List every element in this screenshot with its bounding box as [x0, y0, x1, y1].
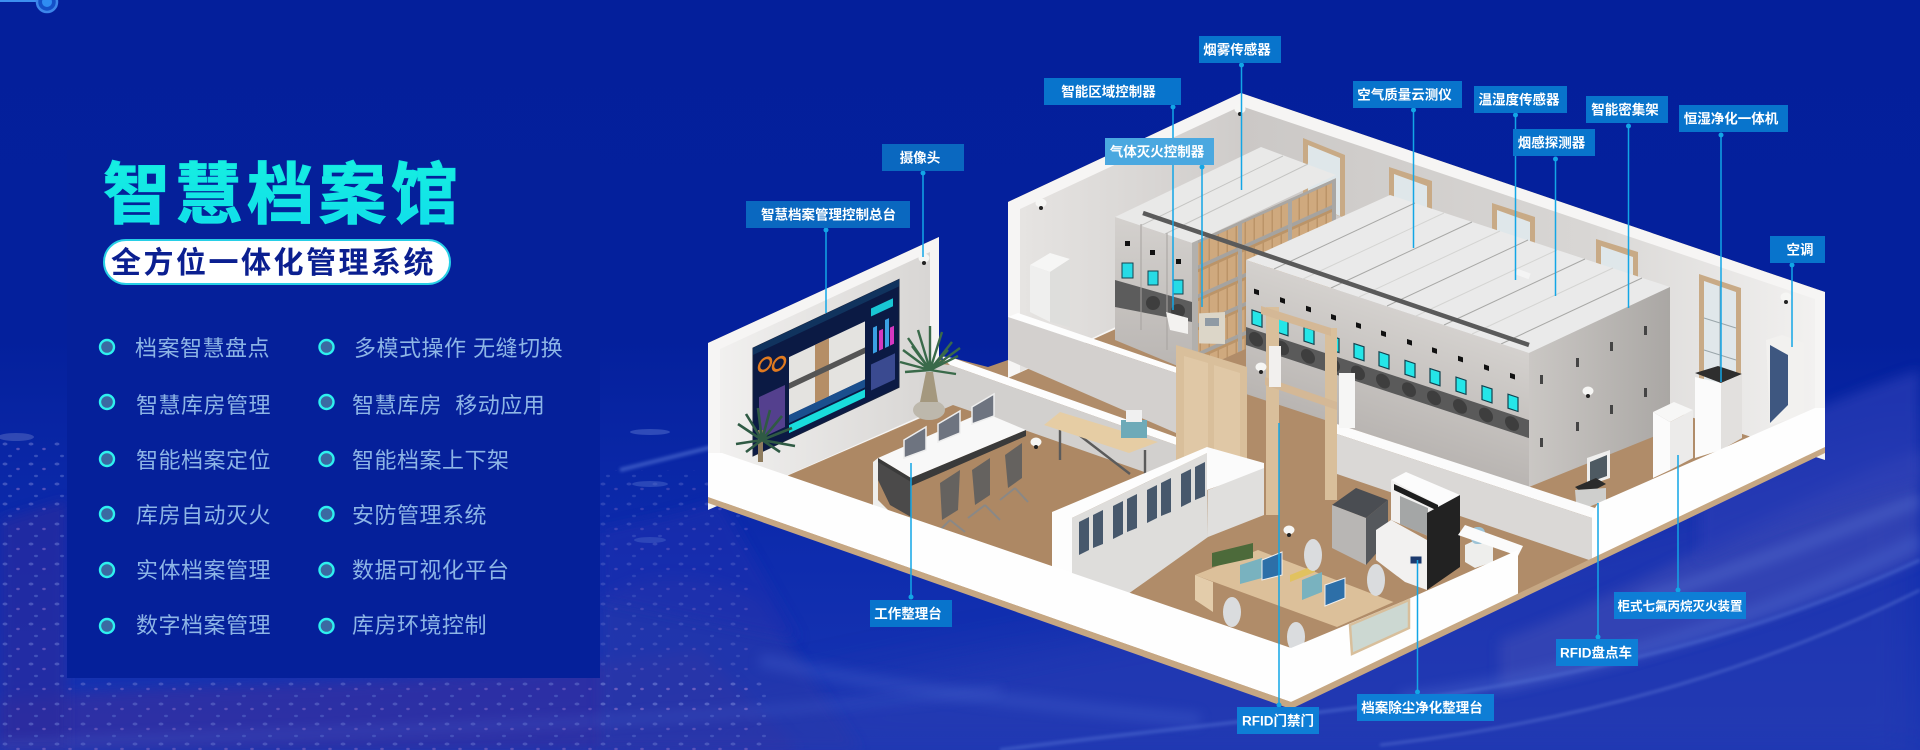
dome cameras — [918, 104, 1792, 537]
water dispenser — [1465, 527, 1493, 568]
label: 摄像头 — [882, 144, 964, 257]
item: 智慧库房管理: 智慧库房管理 — [136, 393, 271, 418]
item: 库房环境控制: 库房环境控制 — [352, 613, 487, 638]
label: 摄像头: 摄像头 — [900, 150, 940, 166]
windows on back wall — [1303, 138, 1741, 385]
item: 智能档案定位: 智能档案定位 — [136, 448, 271, 473]
white cabinet in back room — [1030, 253, 1070, 327]
label: 智慧档案管理控制总台: 智慧档案管理控制总台 — [761, 206, 896, 222]
item: 智能档案上下架: 智能档案上下架 — [352, 448, 510, 473]
label: 空气质量云测仪: 空气质量云测仪 — [1357, 86, 1452, 102]
gas fire controller — [1199, 307, 1225, 348]
label: 气体灭火控制器 — [1105, 138, 1214, 307]
copier — [1332, 488, 1388, 565]
floor base — [708, 93, 1825, 706]
dust purifier bench — [1376, 472, 1460, 590]
item: 数据可视化平台: 数据可视化平台 — [352, 558, 510, 583]
label: 智慧档案管理控制总台 — [746, 201, 910, 313]
item: 数字档案管理: 数字档案管理 — [136, 613, 271, 638]
ornament: top-left node — [0, 0, 57, 12]
back room front wall — [1008, 313, 1176, 433]
item: 智慧库房 移动应用: 智慧库房 移动应用 — [352, 393, 545, 418]
label: 恒湿净化一体机: 恒湿净化一体机 — [1684, 110, 1779, 126]
back walls — [1008, 93, 1825, 460]
label: 空调 — [1770, 236, 1825, 347]
label: 档案除尘净化整理台 — [1357, 560, 1494, 721]
subtitle pill: 全方位一体化管理系统 — [111, 246, 436, 280]
corridor wall — [1337, 373, 1595, 561]
feature list — [100, 336, 563, 638]
office chairs — [1223, 539, 1385, 652]
label: 柜式七氟丙烷灭火装置 — [1614, 455, 1746, 619]
wood base edge — [708, 447, 1825, 709]
label: 烟感探测器: 烟感探测器 — [1518, 134, 1586, 150]
label: 智能密集架: 智能密集架 — [1591, 102, 1659, 118]
work desk with monitors and chairs — [873, 394, 1028, 534]
label: RFID门禁门 — [1237, 423, 1319, 734]
plants — [736, 326, 960, 462]
label: 气体灭火控制器: 气体灭火控制器 — [1110, 144, 1205, 160]
dense shelf A — [1115, 147, 1336, 373]
plant: palm — [900, 326, 960, 420]
item: 安防管理系统: 安防管理系统 — [352, 503, 487, 528]
label: 烟感探测器 — [1513, 129, 1595, 296]
label: 档案除尘净化整理台: 档案除尘净化整理台 — [1361, 700, 1483, 716]
label: 工作整理台: 工作整理台 — [874, 606, 942, 622]
office glass partition — [1350, 600, 1409, 654]
building floor plan illustration — [708, 93, 1825, 709]
label: 温湿度传感器: 温湿度传感器 — [1478, 92, 1560, 108]
title: 智慧档案馆 — [103, 158, 463, 233]
wooden door — [1176, 345, 1247, 497]
item: 多模式操作 无缝切换: 多模式操作 无缝切换 — [354, 336, 563, 361]
label: 温湿度传感器 — [1474, 86, 1567, 280]
RFID access gate — [1261, 306, 1337, 515]
left wall — [708, 237, 939, 510]
label: RFID门禁门: RFID门禁门 — [1242, 712, 1314, 728]
label: 空气质量云测仪 — [1353, 81, 1462, 248]
panel: feature list background — [67, 150, 600, 678]
plant: small fern — [736, 408, 795, 462]
left room partition — [930, 356, 1176, 490]
front outer wall — [708, 453, 1518, 702]
fire suppression and humidifier units — [1653, 335, 1804, 478]
office desk — [1195, 543, 1394, 627]
label: 烟雾传感器: 烟雾传感器 — [1203, 42, 1271, 58]
label: 工作整理台 — [870, 463, 952, 627]
item: 档案智慧盘点: 档案智慧盘点 — [135, 336, 270, 361]
side table — [1044, 410, 1158, 486]
right outer wall — [1592, 408, 1825, 560]
label: 恒湿净化一体机 — [1679, 105, 1788, 382]
RFID inventory cart — [1575, 450, 1610, 508]
label: 柜式七氟丙烷灭火装置: 柜式七氟丙烷灭火装置 — [1617, 598, 1743, 614]
label: RFID盘点车: RFID盘点车 — [1560, 644, 1632, 660]
office right wall top — [1458, 525, 1523, 556]
office: copier, purifier bench, dispenser — [1195, 472, 1493, 652]
dense shelf B — [1143, 195, 1670, 487]
label: 烟雾传感器 — [1199, 36, 1281, 190]
label: RFID盘点车 — [1556, 503, 1638, 666]
label: 智能密集架 — [1586, 96, 1668, 308]
left room floor — [722, 405, 1210, 600]
large screen control console — [753, 279, 899, 456]
zone controller — [1166, 312, 1188, 334]
label: 空调: 空调 — [1786, 242, 1814, 258]
item: 库房自动灭火: 库房自动灭火 — [136, 503, 271, 528]
file cabinet — [1052, 447, 1264, 594]
label: 智能区域控制器: 智能区域控制器 — [1061, 84, 1156, 100]
item: 实体档案管理: 实体档案管理 — [136, 558, 271, 583]
label: 智能区域控制器 — [1044, 78, 1181, 310]
